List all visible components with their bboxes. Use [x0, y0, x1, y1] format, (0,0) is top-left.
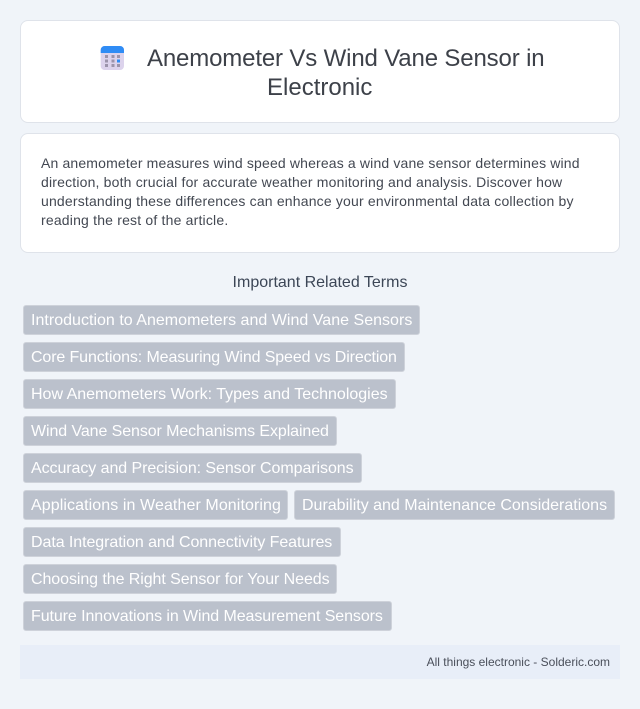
text block: introduction	[41, 155, 580, 228]
tag	[294, 490, 615, 520]
heading: important related terms: Important Related Terms	[233, 274, 407, 291]
tag: Introduction to Anemometers and Wind Vane Sensors	[31, 312, 412, 329]
tag	[23, 416, 337, 446]
footer: attribution	[20, 645, 620, 679]
panel: related term tags	[23, 305, 615, 631]
tag: Wind Vane Sensor Mechanisms Explained	[31, 423, 329, 440]
tag	[23, 527, 341, 557]
tag: Future Innovations in Wind Measurement Sensors	[31, 608, 383, 625]
icon: calendar grid	[100, 46, 124, 70]
tag: How Anemometers Work: Types and Technologies	[31, 386, 388, 403]
text block: introduction: understanding these differences can enhance your environmental data collection by	[41, 193, 574, 209]
tag: Core Functions: Measuring Wind Speed vs Direction	[31, 349, 397, 366]
tag	[23, 379, 396, 409]
title	[147, 45, 544, 101]
tag: Data Integration and Connectivity Features	[31, 534, 332, 551]
tag	[23, 453, 362, 483]
panel: introduction text	[20, 133, 620, 253]
tag: Accuracy and Precision: Sensor Comparisons	[31, 460, 354, 477]
title: Anemometer Vs Wind Vane Sensor in	[147, 45, 544, 72]
tag	[23, 305, 420, 335]
tag	[23, 564, 337, 594]
footer: attribution: All things electronic - Solderic.com	[427, 655, 610, 669]
text block: introduction: reading the rest of the article.	[41, 212, 228, 228]
tag: Choosing the Right Sensor for Your Needs	[31, 571, 330, 588]
tag	[23, 342, 405, 372]
title: Electronic	[267, 74, 372, 101]
tag: Applications in Weather Monitoring	[31, 497, 281, 514]
tag	[23, 490, 288, 520]
text block: introduction: An anemometer measures wind speed whereas a wind vane sensor determines wind	[41, 155, 580, 171]
panel: title card	[20, 20, 620, 123]
text block: introduction: direction, both crucial for accurate weather monitoring and analysis. Discover how	[41, 174, 562, 190]
tag	[23, 601, 392, 631]
tag: Durability and Maintenance Considerations	[302, 497, 607, 514]
